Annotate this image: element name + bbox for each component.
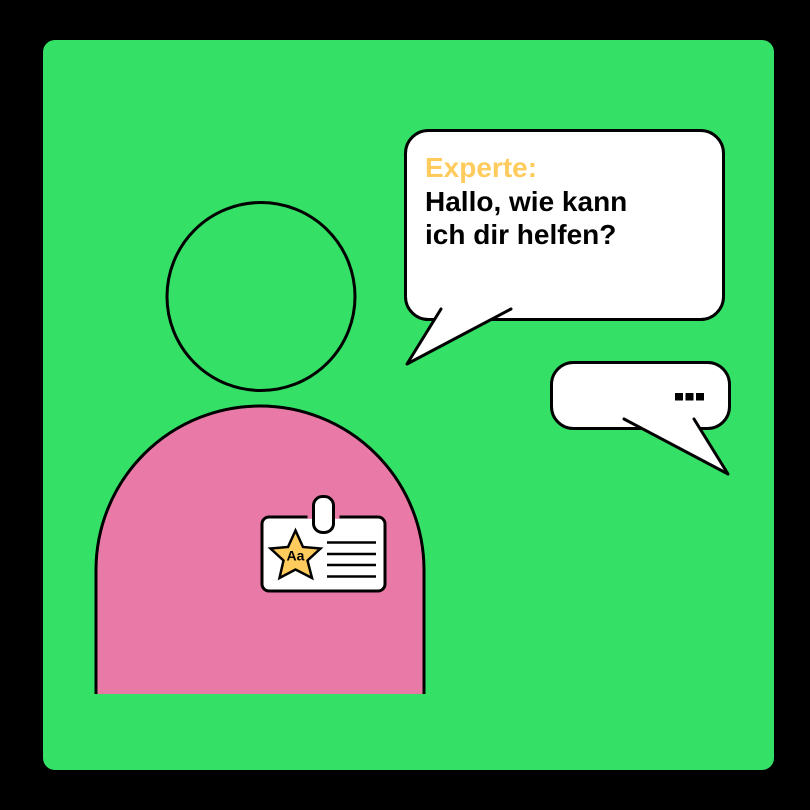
badge card [262,517,385,591]
expert speech bubble [406,130,724,364]
badge clip [314,496,334,532]
badge clip gap [308,514,340,519]
reply tail [624,419,728,474]
person body [96,406,424,694]
reply speech bubble [552,362,730,474]
badge text lines [327,542,376,576]
person figure [96,202,424,694]
typing dots [675,393,704,400]
name badge [262,496,385,591]
bubble tail [407,309,511,364]
star label: Aa [287,548,305,564]
person head [167,202,355,390]
bubble message: ich dir helfen? [425,219,616,250]
reply body [552,362,730,428]
bubble body [406,130,724,320]
badge star [270,530,320,578]
bubble message: Hallo, wie kann [425,186,627,217]
bubble heading: Experte: [425,152,537,183]
